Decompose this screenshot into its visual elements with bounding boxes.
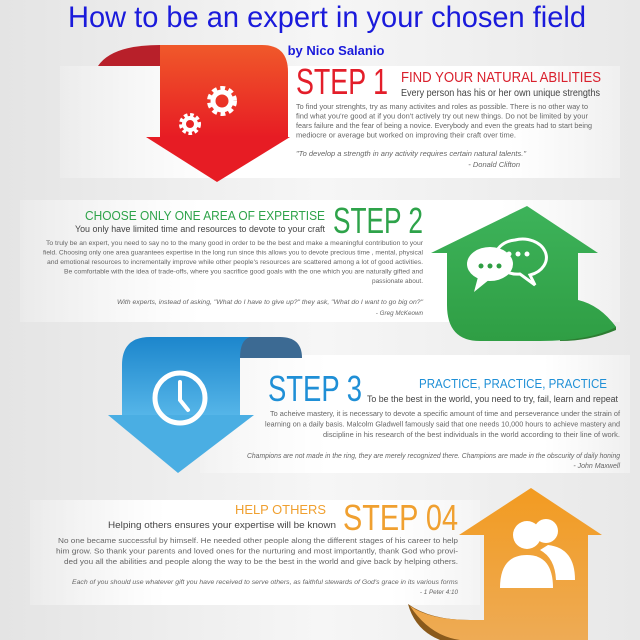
text block: step 2: passionate about.	[372, 278, 423, 285]
byline: by Nico Salanio	[288, 43, 384, 58]
text block: step 2	[43, 200, 424, 317]
text block: step 3: PRACTICE, PRACTICE, PRACTICE	[419, 376, 607, 391]
icon: red arrow with gears	[98, 45, 290, 182]
text block: step 3: STEP 3	[268, 368, 362, 409]
text block: step 1	[296, 61, 601, 169]
text block: step 4: Helping others ensures your expertise will be known	[108, 520, 336, 530]
text block: step 1: mediocre or average but worked on improving their craft over time.	[296, 130, 516, 140]
text block: step 2: Be comfortable with the idea of trade-offs, where you sacrifice good goals with the one which you are naturally gifted and	[64, 268, 424, 276]
text block: step 2: and emotional resources to incrementally improve while other people's resources are scattered among a lot of good activities.	[47, 259, 423, 266]
panel: step 4 band	[30, 500, 480, 605]
text block: step 2: To truly be an expert, you need to say no to the many good in order to be the best and make a meaningful contribution to your	[46, 240, 423, 247]
text block: step 1: "To develop a strength in any activity requires certain natural talents."	[296, 149, 526, 158]
text block: step 4: No one became successful by himself. He needed other people along the different stages of his career to help	[58, 536, 458, 545]
text block: step 4: ded you all the abilities and people along the way to be the best in the world and give back by helping others.	[64, 557, 458, 566]
text block: step 3: Champions are not made in the ring, they are merely recognized there. Champions are made in the obscurity of daily honing	[247, 453, 620, 460]
text block: step 2: - Greg McKeown	[376, 310, 423, 317]
text block: step 1: - Donald Clifton	[468, 160, 520, 169]
text block: step 4: Each of you should use whatever gift you have received to serve others, as faithful stewards of God's grace in its various forms	[72, 579, 459, 586]
text block: step 3: learning on a daily basis. Malcolm Gladwell famously said that one needs 10,000 hours to achieve mastery and	[265, 422, 620, 428]
text block: step 2: STEP 2	[333, 200, 423, 241]
text block: step 1: fears failure and the fear of being a novice. Everybody and even the greats had to start being	[296, 121, 592, 130]
text block: step 3: To be the best in the world, you need to try, fail, learn and repeat	[367, 394, 618, 404]
text block: step 2: You only have limited time and resources to devote to your craft	[75, 224, 325, 234]
text block: step 3	[247, 368, 620, 470]
text block: step 1: Every person has his or her own unique strengths	[401, 87, 600, 99]
text block: step 1: FIND YOUR NATURAL ABILITIES	[401, 69, 601, 86]
icon: green house with chat bubbles	[431, 206, 616, 341]
panel: step 1 band	[60, 66, 620, 178]
text block: step 1: To find your strenghts, try as many activites and roles as possible. There is no other way to	[296, 102, 588, 111]
title: How to be an expert in your chosen field	[68, 1, 586, 34]
panel: step 3 band	[200, 355, 630, 473]
text block: step 1: STEP 1	[296, 61, 388, 102]
text block: step 2: With experts, instead of asking, "What do I have to give up?" they ask, "What do I want to go big on?"	[117, 299, 424, 306]
icon: blue arrow with clock	[108, 337, 302, 473]
text block: step 3: To acheive mastery, it is necessary to devote a specific amount of time and perseverance under the strain of	[270, 411, 620, 418]
text block: step 4	[56, 497, 459, 596]
text block: step 4: him grow. So thank your parents and loved ones for the nurturing and most importantly, thank God who provi-	[56, 546, 459, 556]
text block: step 2: field. Choosing only one area guarantees expertise in the long run since this allows you to devote precious time , mental, physical	[43, 250, 423, 256]
icon: orange house with people	[408, 488, 602, 640]
text block: step 3: discipline in his research of the best individuals in the world according to their line of work.	[323, 432, 620, 439]
text block: step 1: find what you're good at if you don't actively try out new things. Do not be limited by your	[296, 112, 588, 120]
text block: step 2: CHOOSE ONLY ONE AREA OF EXPERTISE	[85, 208, 325, 223]
panel: step 2 band	[20, 200, 620, 322]
text block: step 4: - 1 Peter 4:10	[420, 589, 458, 596]
text block: step 4: HELP OTHERS	[235, 502, 326, 517]
text block: step 4: STEP 04	[343, 497, 458, 538]
text block: step 3: - John Maxwell	[573, 463, 620, 470]
